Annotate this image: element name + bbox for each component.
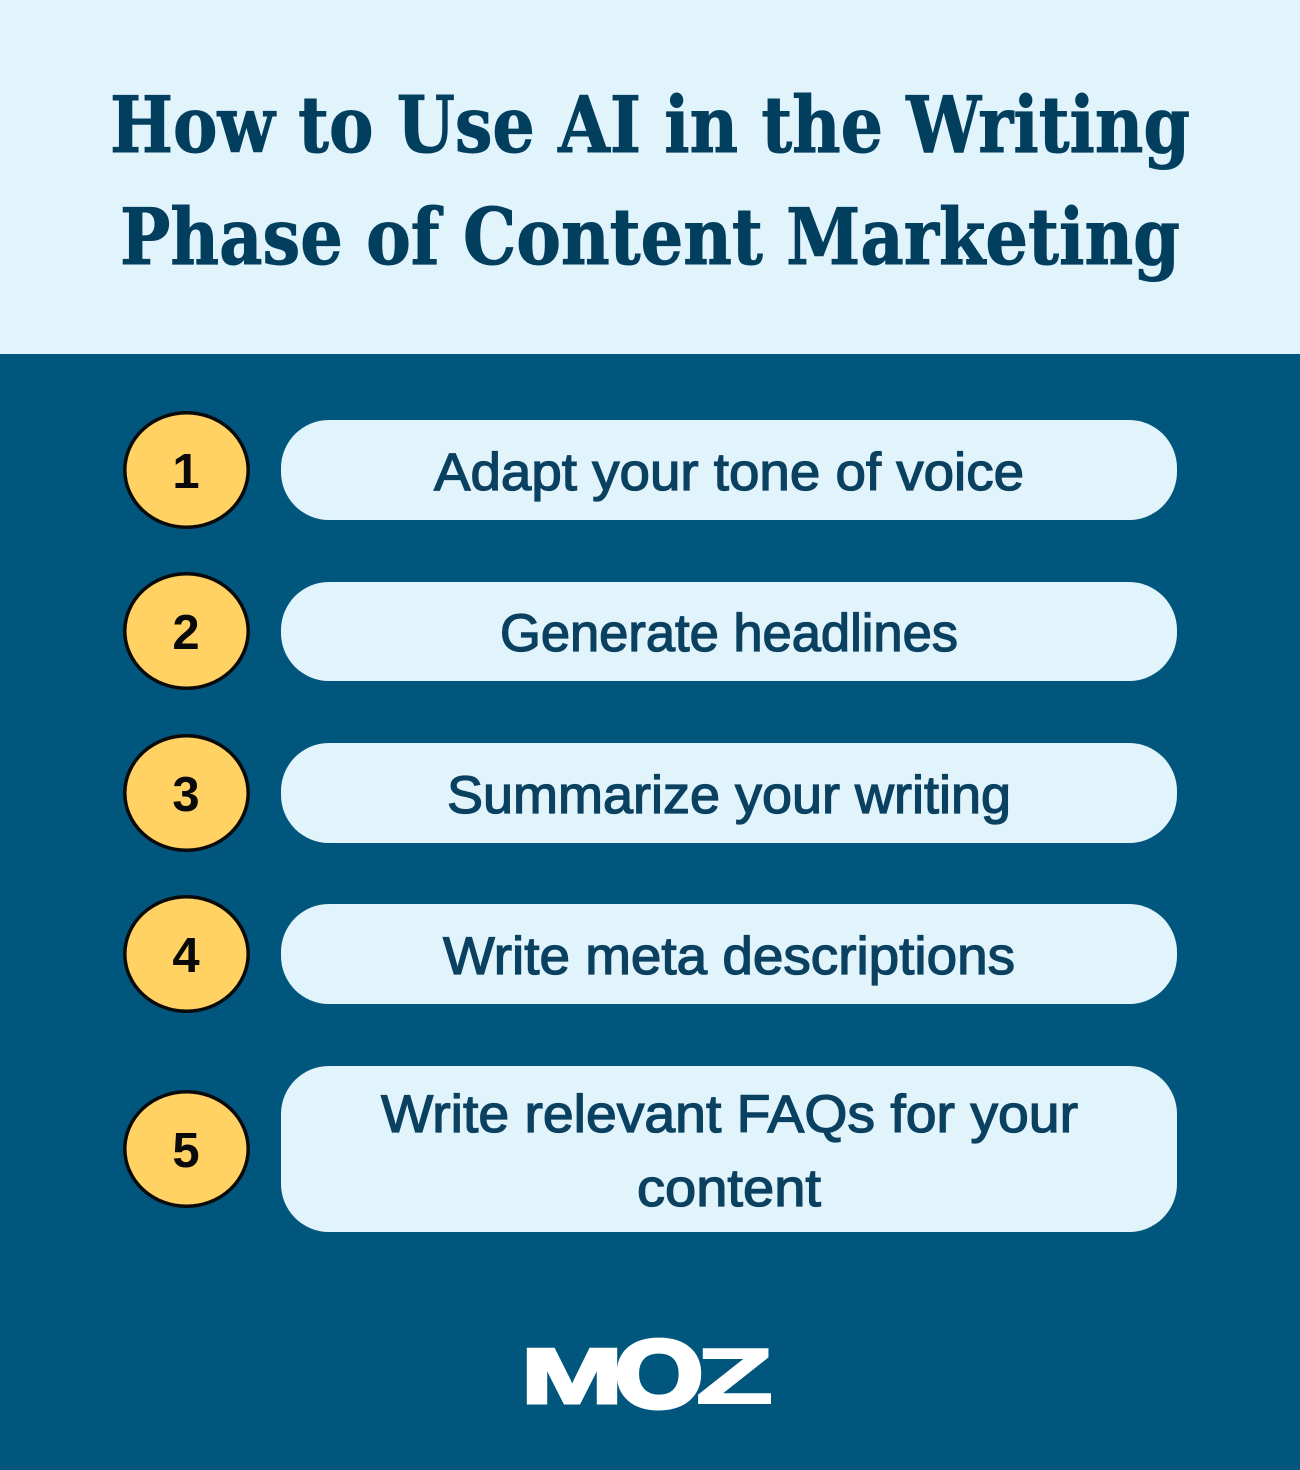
logo: MOZ: Z xyxy=(696,1332,773,1420)
pill 3: Summarize your writing xyxy=(447,766,1011,825)
step 4 xyxy=(125,897,1177,1011)
badge 1 xyxy=(125,413,248,527)
pill 2 xyxy=(281,582,1177,681)
title xyxy=(110,80,1190,283)
badge 5: 5 xyxy=(172,1124,200,1178)
pill 3 xyxy=(281,743,1177,843)
pill 1: Adapt your tone of voice xyxy=(434,443,1024,502)
logo: MOZ xyxy=(521,1321,773,1428)
logo: MOZ: M xyxy=(521,1332,623,1420)
badge 3: 3 xyxy=(172,768,200,822)
header panel xyxy=(0,0,1300,354)
step 3 xyxy=(125,736,1177,850)
step 1 xyxy=(125,413,1177,527)
pill 4 xyxy=(281,904,1177,1004)
pill 5: Write relevant FAQs for your xyxy=(381,1085,1078,1144)
step 2 xyxy=(125,574,1177,688)
pill 2: Generate headlines xyxy=(500,604,958,663)
pill 1 xyxy=(281,420,1177,520)
pill 5 xyxy=(281,1066,1177,1232)
badge 1: 1 xyxy=(172,445,200,499)
pill 4: Write meta descriptions xyxy=(443,927,1015,986)
badge 5 xyxy=(125,1092,248,1206)
badge 4 xyxy=(125,897,248,1011)
badge 4: 4 xyxy=(172,929,200,983)
badge 3 xyxy=(125,736,248,850)
badge 2 xyxy=(125,574,248,688)
badge 2: 2 xyxy=(172,606,200,660)
logo: MOZ: O xyxy=(615,1321,703,1428)
pill 5: content xyxy=(637,1159,821,1218)
step 5 xyxy=(125,1066,1177,1232)
